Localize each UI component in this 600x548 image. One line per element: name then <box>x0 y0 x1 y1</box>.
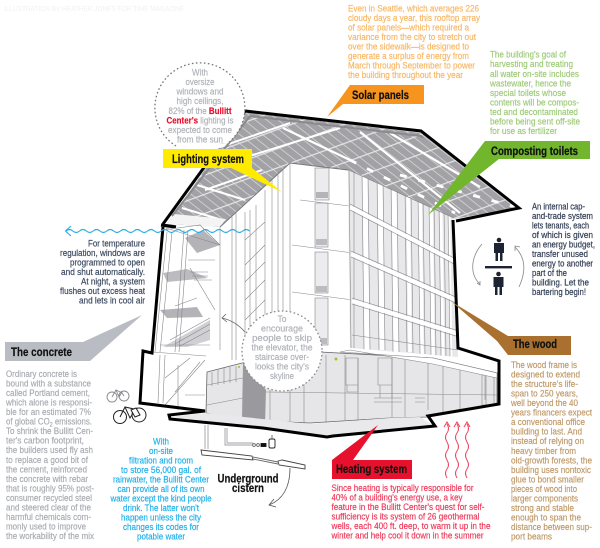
text: the wood: the structure's life- <box>511 379 578 389</box>
dotted circle: staircase note: people to skip <box>252 333 312 343</box>
text: the concrete: Ordinary concrete is <box>6 369 77 379</box>
text: cap and trade: and-trade system <box>532 211 593 221</box>
label: heating system: Heating system <box>336 464 407 476</box>
label: heating system <box>332 425 412 479</box>
text: the wood: designed to extend <box>511 370 580 380</box>
text: the wood: instead of relying on <box>511 436 584 446</box>
icon: small bicycle <box>107 390 129 402</box>
dotted circle: staircase note <box>242 311 322 391</box>
dotted circle: lighting note: Center's lighting is <box>166 115 234 125</box>
text: the concrete: the workability of the mix <box>6 531 94 541</box>
text: the wood: old-growth forests, the <box>511 455 592 465</box>
text: solar panels: generate a surplus of energy from <box>348 51 469 61</box>
text: heating system: wells, each 400 ft. deep, to warm it up in the <box>331 521 490 531</box>
roof solar array <box>167 112 516 227</box>
text: the wood: years financers expect <box>511 408 592 418</box>
text: the wood: larger components <box>511 493 578 503</box>
text: the concrete: emissions. <box>53 417 92 427</box>
text: temperature regulation: and lets in cool air <box>79 295 145 305</box>
front facade windows <box>232 163 353 360</box>
dotted circle: lighting note: from the sun <box>177 134 223 144</box>
text: the concrete: the concrete with rebar <box>6 474 88 484</box>
text: solar panels: Even in Seattle, which averages 226 <box>348 3 479 13</box>
text: composting toilets: special toilets whose <box>490 88 566 98</box>
dotted circle: lighting note: high ceilings, <box>176 96 224 106</box>
text: heating system: 40% of a building's energy use, a key <box>332 492 463 502</box>
stairwell wing <box>152 225 220 410</box>
dotted circle: lighting note: oversize <box>186 77 214 87</box>
text: solar panels: March through September to power <box>348 60 475 70</box>
text: rainwater: drink. The latter won't <box>123 503 199 513</box>
dotted circle: lighting note: 82% of the Bullitt <box>168 106 232 116</box>
dotted circle: staircase note: To <box>278 314 286 324</box>
label: underground cistern: Underground <box>218 474 278 486</box>
dotted circle: staircase note: looks the city's <box>255 362 309 372</box>
text: solar panels: cloudy days a year, this rooftop array <box>348 13 480 23</box>
text: the concrete: To shrink the Bullitt Cen- <box>6 426 93 436</box>
label: the wood: The wood <box>513 339 557 351</box>
text: rainwater: changes its codes for <box>123 522 199 532</box>
ground floor <box>170 350 497 436</box>
label: solar panels: Solar panels <box>352 90 409 102</box>
text: the concrete: the cement, reinforced <box>6 464 87 474</box>
label: the wood <box>452 302 571 355</box>
dotted circle: lighting note: With <box>192 68 208 78</box>
text: the concrete: of global CO <box>6 417 56 427</box>
label: underground cistern <box>218 474 278 495</box>
building illustration <box>140 100 530 437</box>
roof eave <box>161 111 519 227</box>
text: cap and trade: An internal cap- <box>532 201 585 211</box>
text: the concrete: ter's carbon footprint, <box>6 436 84 446</box>
dotted circle: lighting note: expected to come <box>168 125 232 135</box>
text: the concrete: monly used to improve <box>6 522 86 532</box>
text: the wood: a conventional office <box>511 417 585 427</box>
heavy outline <box>140 220 499 437</box>
text: composting toilets: all water on-site includes <box>490 69 579 79</box>
text: the concrete: to replace a good bit of <box>6 455 88 465</box>
text: cap and trade: of which is given <box>532 230 593 240</box>
arrow: wavy airflow <box>66 226 250 236</box>
text: the wood: distance between sup- <box>511 522 592 532</box>
text: solar panels: over the sidewalk—is designed to <box>348 41 469 51</box>
icon: large bicycle <box>114 407 146 424</box>
text: cap and trade: building. Let the <box>532 278 589 288</box>
text: heating system: winter and help cool it down in the summer <box>331 531 484 541</box>
text: temperature regulation: and shut automatically. <box>61 267 145 277</box>
text: temperature regulation: For temperature <box>88 238 145 248</box>
text: the wood: well beyond the 40 <box>510 398 578 408</box>
text: the concrete: which alone is responsi- <box>5 398 92 408</box>
label: the concrete: The concrete <box>11 347 72 359</box>
timber facade <box>348 170 459 357</box>
text: the concrete: consumer recycled steel <box>6 493 92 503</box>
text: temperature regulation: programmed to open <box>70 257 145 267</box>
icon: tenants exchanging energy <box>473 238 524 295</box>
text: cap and trade: part of the <box>532 268 567 278</box>
label: composting toilets <box>428 141 590 215</box>
text: heating system <box>331 483 490 541</box>
text: the wood: building to last. And <box>511 427 582 437</box>
text: heating system: Since heating is typically responsible for <box>332 483 474 493</box>
text: solar panels: of solar panels—which required a <box>348 22 469 32</box>
text: composting toilets: harvesting and treating <box>490 59 573 69</box>
text: composting toilets: before being sent off-site <box>490 116 580 126</box>
dotted circle: staircase note: the elevator, the <box>252 342 312 352</box>
arrow: to cistern <box>269 468 290 507</box>
text: rainwater: happen unless the city <box>121 512 201 522</box>
text: temperature regulation: At night, a system <box>81 276 145 286</box>
text: the concrete: and steered clear of the <box>6 502 91 512</box>
text: temperature regulation: flushes out excess heat <box>60 286 145 296</box>
label: lighting system: Lighting system <box>172 154 244 166</box>
label: underground cistern: cistern <box>232 483 264 495</box>
text: the wood: heavy timber from <box>511 446 576 456</box>
text: temperature regulation: regulation, windows are <box>60 248 145 258</box>
text: the concrete: that is roughly 95% post- <box>6 483 94 493</box>
text: the wood: pieces of wood into <box>511 484 577 494</box>
text: the wood <box>510 360 592 542</box>
text: composting toilets: contents will be compos- <box>490 97 579 107</box>
text: the wood: glue to bond smaller <box>511 474 584 484</box>
text: the concrete: bound with a substance <box>6 378 91 388</box>
text: rainwater: filtration and room <box>129 455 193 465</box>
text: rainwater: on-site <box>149 446 173 456</box>
text: heating system: feature in the Bullitt Center's quest for self- <box>332 502 484 512</box>
text: cap and trade: bartering begin! <box>532 287 586 297</box>
label: lighting system <box>163 149 282 192</box>
text: rainwater: potable water <box>137 532 185 542</box>
text: heating system: sufficiency is its system of 26 geothermal <box>332 512 480 522</box>
text: composting toilets <box>489 50 580 136</box>
dotted circle: lighting note: windows and <box>176 87 224 97</box>
text: cap and trade <box>532 201 595 297</box>
dotted circle: staircase note: encourage <box>261 324 303 334</box>
credit line: ILLUSTRATION BY HEATHER JONES FOR TIME MAGAZINE <box>4 6 184 13</box>
text: the concrete: ble for an estimated 7% <box>6 407 91 417</box>
arrow: staircase pointer <box>222 314 245 332</box>
text: the concrete: harmful chemicals com- <box>6 512 91 522</box>
text: solar panels: the building throughout the year <box>348 70 463 80</box>
text: the wood: port beams <box>511 532 552 542</box>
text: the concrete: the builders used fly ash <box>6 445 93 455</box>
text: rainwater: water except the kind people <box>110 494 212 504</box>
text: the concrete: called Portland cement, <box>6 388 90 398</box>
dotted circle: lighting note <box>155 63 245 153</box>
text: rainwater: to store 56,000 gal. of <box>121 465 201 475</box>
text: composting toilets: wastewater, hence the <box>489 78 571 88</box>
text: rainwater: With <box>153 436 169 446</box>
text: the concrete: 2 <box>50 423 53 429</box>
text: solar panels <box>348 3 480 80</box>
building wall base <box>140 163 497 437</box>
text: composting toilets: for use as fertilizer <box>490 126 557 136</box>
text: the wood: The wood frame is <box>511 360 577 370</box>
arrows: rising heat <box>444 422 470 478</box>
cistern pipes and tanks <box>201 425 305 469</box>
text: the wood: enough to span the <box>511 512 581 522</box>
text: rainwater: can provide all of its own <box>118 484 204 494</box>
text: rainwater <box>110 436 212 542</box>
text: composting toilets: The building's goal of <box>490 50 566 60</box>
dotted circle: staircase note: skyline <box>270 371 294 381</box>
text: composting toilets: ted and decontaminated <box>490 107 578 117</box>
text: cap and trade: transfer unused <box>532 249 588 259</box>
text: rainwater: rainwater, the Bullitt Center <box>113 474 209 484</box>
text: the concrete <box>5 369 94 541</box>
label: the concrete <box>5 315 142 361</box>
text: the wood: span to 250 years, <box>511 389 578 399</box>
label: composting toilets: Composting toilets <box>491 146 578 158</box>
text: solar panels: variance from the city to stretch out <box>348 32 476 42</box>
text: the wood: strong and stable <box>511 503 574 513</box>
text: temperature regulation <box>60 238 145 305</box>
label: solar panels <box>327 85 424 117</box>
text: the wood: building uses nontoxic <box>511 465 591 475</box>
dotted circle: staircase note: staircase over- <box>255 352 309 362</box>
